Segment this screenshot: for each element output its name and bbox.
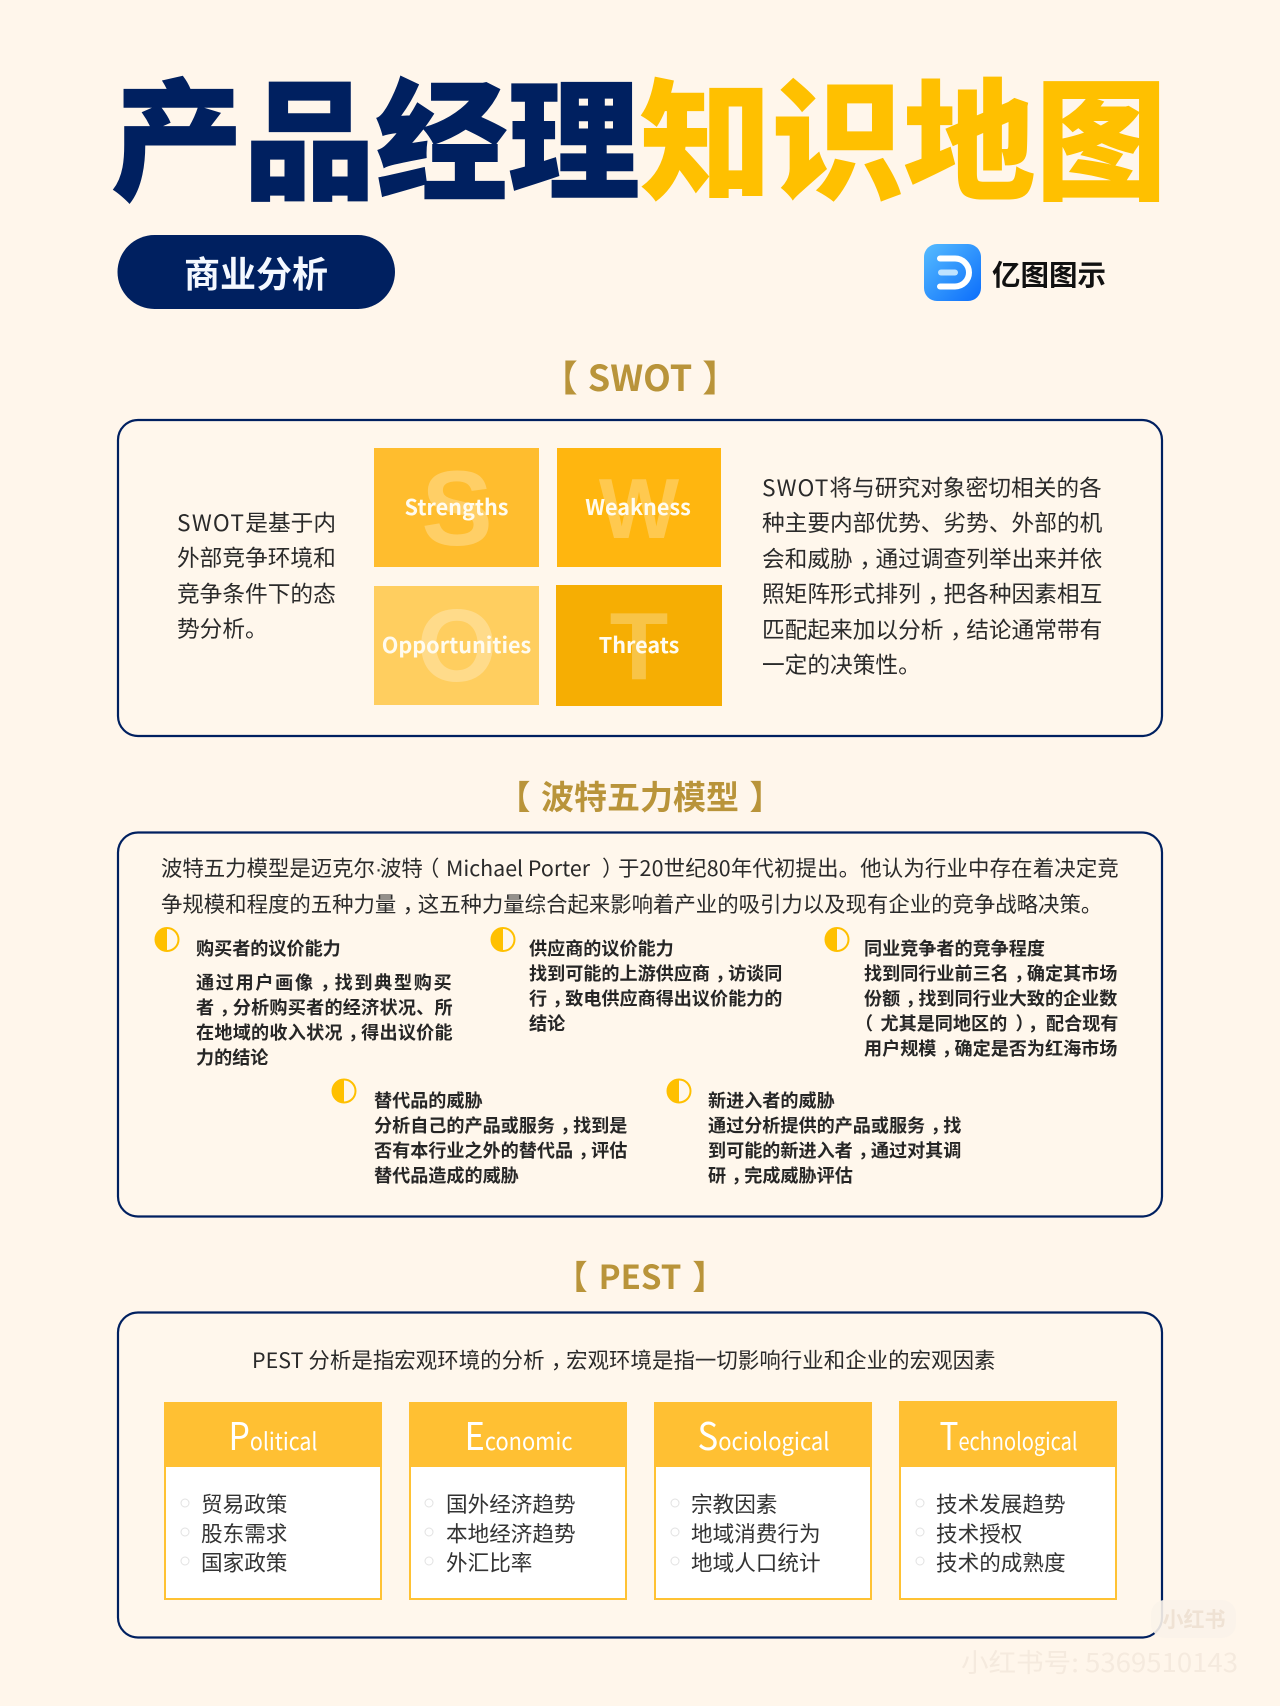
text: SWOT description right: 匹配起来加以分析 ，结论通常带有 — [762, 612, 1102, 645]
title: 知识地图 — [640, 37, 1167, 227]
force: new entrants: 研 ，完成威胁评估 — [708, 1162, 853, 1188]
force: competitors: 份额 ，找到同行业大致的企业数 — [864, 985, 1117, 1011]
title: 产品经理 — [111, 37, 640, 227]
list: 宗教因素 — [691, 1488, 777, 1519]
panel: PEST — [118, 1312, 1162, 1638]
heading: SWOT: 【 SWOT 】 — [542, 350, 738, 402]
force: suppliers: 结论 — [529, 1010, 565, 1036]
card: Political: Political — [228, 1406, 318, 1461]
icon: half circle — [332, 1080, 356, 1102]
force: competitors: 找到同行业前三名 ，确定其市场 — [864, 960, 1117, 986]
icon: half circle — [492, 928, 514, 951]
force: suppliers: 找到可能的上游供应商 ，访谈同 — [529, 960, 782, 986]
list: 地域消费行为 — [691, 1518, 821, 1548]
text: Porter intro: 波特 — [380, 852, 423, 883]
tile: Threats: Threats — [599, 629, 679, 660]
text: Porter intro: · — [375, 857, 382, 881]
force: buyers: 购买者的议价能力 — [196, 935, 341, 961]
title — [111, 37, 1167, 227]
force: competitors — [0, 0, 1122, 1061]
text: SWOT intro left: SWOT是基于内 — [177, 505, 336, 538]
force: substitutes: 替代品造成的威胁 — [374, 1162, 519, 1188]
card: Economic — [409, 1402, 627, 1599]
list — [671, 1488, 821, 1578]
text: SWOT description right: 会和威胁 ，通过调查列举出来并依 — [762, 541, 1102, 574]
text: Porter intro: ） — [602, 852, 623, 883]
force: competitors: 同业竞争者的竞争程度 — [864, 935, 1045, 961]
list: 本地经济趋势 — [446, 1518, 576, 1548]
force: competitors: 用户规模 ，确定是否为红海市场 — [864, 1035, 1117, 1061]
force: competitors: 配合现有 — [1046, 1010, 1118, 1036]
panel: SWOT — [0, 0, 1162, 736]
icon: half circle — [156, 928, 178, 951]
card: Sociological: Sociological — [698, 1406, 830, 1461]
text: SWOT intro left: 势分析。 — [177, 611, 268, 644]
logo: 亿图图示 — [924, 244, 1106, 301]
text: SWOT description right: 照矩阵形式排列 ，把各种因素相互 — [762, 576, 1102, 609]
list: 贸易政策 — [201, 1488, 287, 1519]
text: Porter intro: 波特五力模型是迈克尔 — [161, 852, 375, 883]
heading: PEST: 【 PEST 】 — [555, 1251, 725, 1299]
text: SWOT intro left: 竞争条件下的态 — [177, 576, 336, 609]
force: competitors: 尤其是同地区的 — [880, 1010, 1007, 1036]
text: SWOT intro left: 外部竞争环境和 — [177, 540, 336, 573]
heading: 波特五力模型: 【 波特五力模型 】 — [498, 771, 782, 819]
tile: Opportunities: O — [417, 588, 497, 703]
text: SWOT description right: SWOT将与研究对象密切相关的各 — [762, 470, 1102, 503]
list: 外汇比率 — [446, 1546, 532, 1578]
list: 地域人口统计 — [691, 1546, 821, 1578]
icon: half circle — [826, 928, 848, 951]
tile: Strengths — [374, 448, 539, 568]
card: Technological — [899, 1401, 1117, 1599]
force: buyers — [0, 0, 457, 1070]
list — [916, 1488, 1066, 1578]
text: SWOT description right: 一定的决策性。 — [762, 647, 921, 680]
force: new entrants: 新进入者的威胁 — [708, 1087, 835, 1113]
list: 股东需求 — [201, 1518, 287, 1548]
list: 国外经济趋势 — [446, 1488, 576, 1519]
card: Technological: Technological — [940, 1406, 1078, 1461]
list: 技术发展趋势 — [936, 1488, 1066, 1519]
force: buyers: 者 ，分析购买者的经济状况、所 — [196, 994, 453, 1020]
force: competitors: ） — [1016, 1010, 1034, 1036]
logo: 亿图图示: 亿图图示 — [992, 253, 1106, 294]
force: substitutes: 分析自己的产品或服务 ，找到是 — [374, 1112, 627, 1138]
list: 国家政策 — [201, 1546, 287, 1578]
tile: Threats: T — [610, 593, 668, 700]
card: Economic: Economic — [464, 1406, 572, 1461]
tile: Strengths: Strengths — [405, 491, 508, 522]
tile: Strengths: S — [421, 448, 493, 568]
force: buyers: 在地域的收入状况 ，得出议价能 — [196, 1019, 453, 1045]
tile: Weakness: Weakness — [585, 491, 691, 522]
text: Porter intro: Michael Porter — [446, 852, 591, 883]
text: Porter intro: 于20世纪80年代初提出。他认为行业中存在着决定竞 — [618, 852, 1119, 883]
force: competitors: （ — [855, 1010, 873, 1036]
icon: logo mark — [924, 244, 981, 301]
force: new entrants — [0, 0, 965, 1188]
force: suppliers: 行 ，致电供应商得出议价能力的 — [529, 985, 782, 1011]
text: SWOT description right: 种主要内部优势、劣势、外部的机 — [762, 505, 1103, 538]
SWOT matrix — [374, 448, 722, 706]
subtitle pill: 商业分析: 商业分析 — [184, 246, 328, 298]
force: buyers: 通过用户画像 ，找到典型购买 — [196, 969, 453, 995]
force: competitors: ， — [1028, 1010, 1046, 1036]
force: buyers: 力的结论 — [196, 1044, 268, 1070]
watermark: 小红书: 小红书 — [1162, 1604, 1226, 1634]
tile: Weakness — [557, 448, 721, 567]
force: suppliers — [0, 0, 786, 1036]
tile: Opportunities: Opportunities — [382, 629, 531, 660]
watermark: 小红书 — [961, 1600, 1238, 1680]
text: Porter intro: （ — [418, 852, 439, 883]
card: Sociological — [654, 1402, 872, 1599]
list — [425, 1488, 576, 1578]
card: Political — [164, 1402, 382, 1599]
tile: Weakness: W — [599, 462, 680, 557]
text: Porter intro: 争规模和程度的五种力量 ，这五种力量综合起来影响着产业的吸引力以及现有企业的竞争战略决策。 — [161, 888, 1102, 919]
force: substitutes — [0, 0, 631, 1188]
force: new entrants: 通过分析提供的产品或服务 ，找 — [708, 1112, 961, 1138]
watermark: 小红书: 小红书号: 5369510143 — [961, 1643, 1238, 1680]
text: PEST intro: PEST 分析是指宏观环境的分析 ，宏观环境是指一切影响行业和企业的宏观因素 — [252, 1344, 996, 1375]
list: 技术授权 — [936, 1518, 1022, 1548]
subtitle pill: 商业分析 — [118, 235, 395, 309]
force: substitutes: 替代品的威胁 — [374, 1087, 483, 1113]
icon: half circle — [668, 1080, 690, 1102]
list — [181, 1488, 287, 1578]
tile: Threats — [556, 585, 722, 706]
force: substitutes: 否有本行业之外的替代品 ，评估 — [374, 1137, 627, 1163]
tile: Opportunities — [374, 586, 539, 705]
force: new entrants: 到可能的新进入者 ，通过对其调 — [708, 1137, 961, 1163]
list: 技术的成熟度 — [936, 1546, 1066, 1578]
force: suppliers: 供应商的议价能力 — [529, 935, 674, 961]
panel: Porter five forces — [0, 0, 1162, 1216]
